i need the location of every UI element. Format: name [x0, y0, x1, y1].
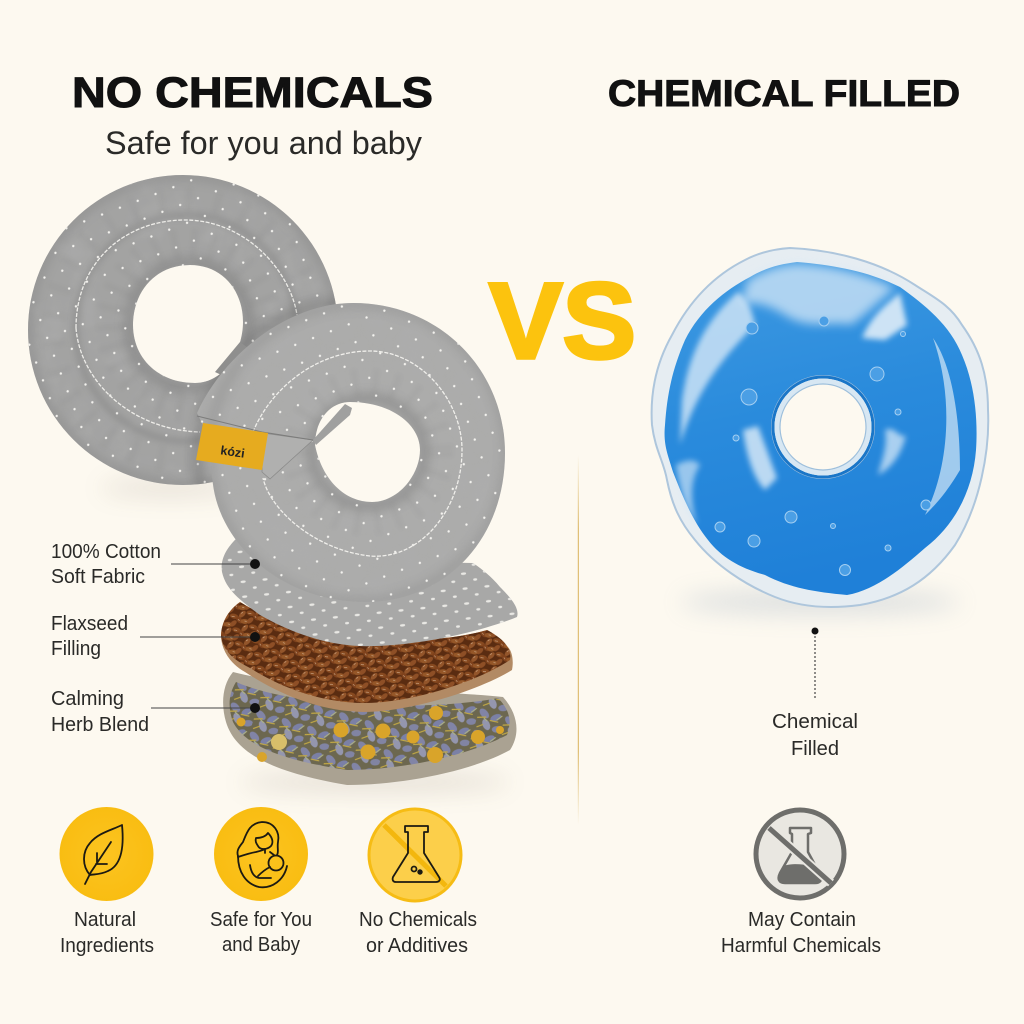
callout: herb blend: Herb Blend [51, 714, 149, 736]
shadows under pad [100, 480, 510, 792]
icon: leaf [60, 807, 154, 901]
callout: flaxseed filling [51, 613, 260, 660]
label: may contain harmful chemicals [721, 909, 881, 957]
chamomile flowers [236, 706, 504, 763]
label: may contain harmful chemicals: Harmful Chemicals [721, 935, 881, 957]
label: no chemicals or additives: or Additives [366, 935, 468, 957]
shadow of front ring on back ring [190, 298, 336, 484]
callout: chemical filled [772, 628, 858, 760]
callout: cotton fabric: 100% Cotton [51, 541, 161, 563]
callout: chemical filled: Chemical [772, 711, 858, 733]
callout: cotton fabric: Soft Fabric [51, 566, 145, 588]
callout: flaxseed filling: Flaxseed [51, 613, 128, 635]
label: natural ingredients [60, 909, 154, 957]
callout: herb blend: Calming [51, 688, 124, 710]
pad: front ring [190, 295, 515, 610]
pad: back ring [28, 175, 336, 485]
callout: herb blend [51, 688, 260, 736]
vs mark: VS [489, 260, 636, 381]
heading: chemical filled: CHEMICAL FILLED [608, 73, 960, 114]
label: safe for you and baby: and Baby [222, 934, 300, 956]
label: no chemicals or additives: No Chemicals [359, 909, 477, 931]
icon: harmful chemicals warning [756, 810, 844, 898]
gel pack shadow [680, 590, 960, 614]
label: natural ingredients: Ingredients [60, 935, 154, 957]
layer: cotton fabric [222, 537, 518, 646]
label: safe for you and baby [210, 909, 312, 956]
overlap tuck [215, 342, 262, 380]
heading: no chemicals: NO CHEMICALS [72, 69, 433, 117]
blue gel [665, 262, 977, 595]
brand tag: kózi [220, 443, 246, 461]
plastic shell [652, 248, 988, 607]
label: may contain harmful chemicals: May Contain [748, 909, 856, 931]
callout: chemical filled: Filled [791, 738, 839, 760]
gel highlights [676, 264, 960, 525]
label: no chemicals or additives [359, 909, 477, 957]
layer: flaxseed filling [221, 602, 513, 712]
product: natural pad with layers [20, 170, 518, 792]
subheading: safe for you and baby: Safe for you and baby [105, 125, 422, 161]
label: natural ingredients: Natural [74, 909, 136, 931]
gel bubbles [715, 316, 931, 576]
layer: calming herb blend [223, 672, 516, 785]
center hole rim [773, 377, 873, 477]
fabric flap [262, 433, 313, 479]
icon: no chemicals flask [369, 809, 461, 901]
product: blue gel pack [652, 248, 988, 614]
callout: cotton fabric [51, 541, 260, 588]
center divider [578, 455, 579, 825]
icon: mother and baby [214, 807, 308, 901]
label: safe for you and baby: Safe for You [210, 909, 312, 931]
brand tag [196, 423, 268, 470]
callout: flaxseed filling: Filling [51, 638, 101, 660]
